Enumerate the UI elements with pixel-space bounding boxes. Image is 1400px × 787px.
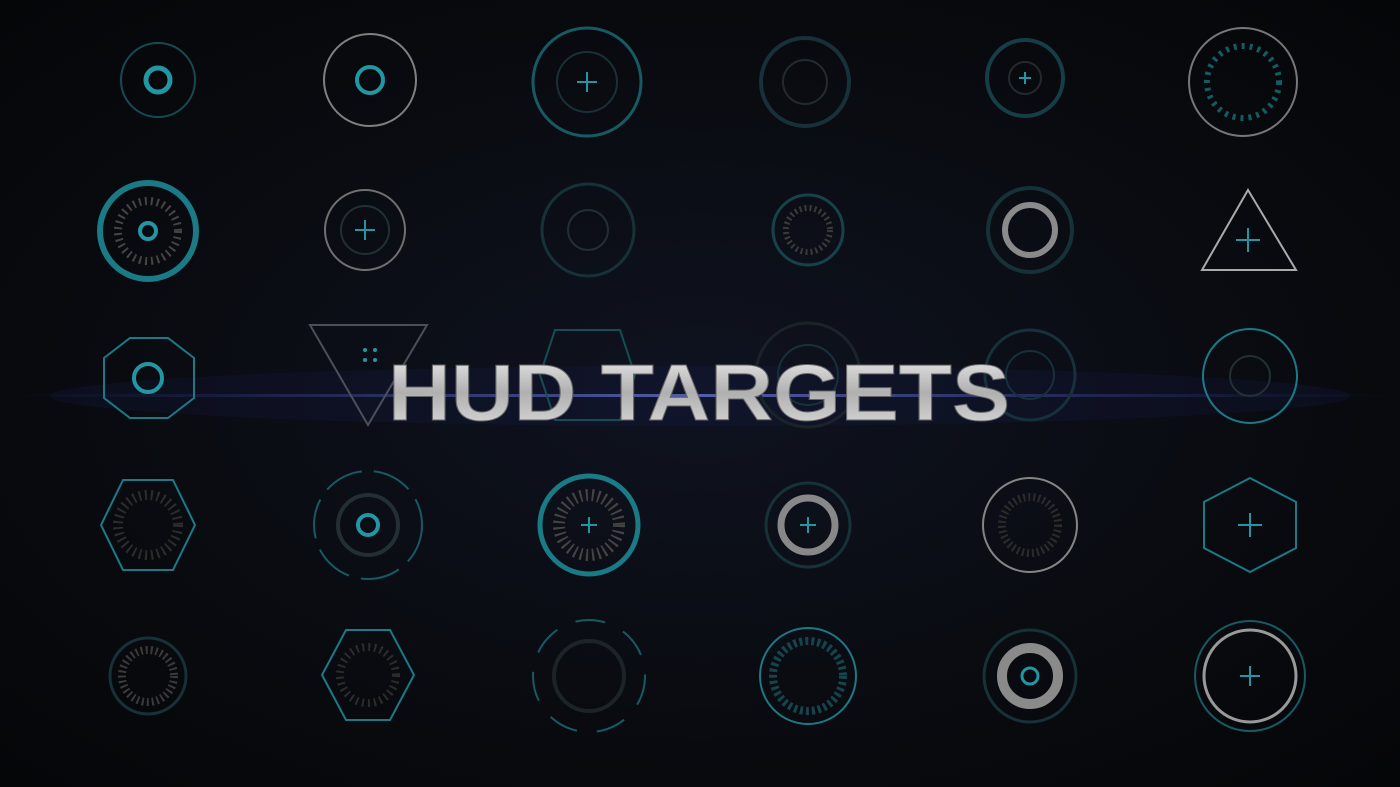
target r3c2 triangle [310,325,427,425]
target r5c5 [984,630,1076,722]
target r3c1 [104,338,194,418]
target r4c2 [314,471,422,579]
row 3 targets [104,323,1297,427]
target r5c4 [760,628,856,724]
target r3c4 [756,323,860,427]
row 2 targets [100,183,1296,279]
target r4c3 [540,476,638,574]
title: HUD TARGETS [388,348,1010,437]
target r4c6 [1204,478,1296,572]
row 1 targets [121,28,1297,136]
target r3c5 [985,330,1075,420]
target r3c3 [540,330,635,420]
target r5c1 [110,638,186,714]
target r4c1 [101,480,195,570]
target r1c4 [761,38,849,126]
target r2c3 [542,184,634,276]
target r2c2 [325,190,405,270]
target r4c4 [766,483,850,567]
target r2c5 [988,188,1072,272]
target r2c6 [1202,190,1296,270]
target r1c5 [987,40,1063,116]
target r5c6 [1195,621,1305,731]
target r1c2 [324,34,416,126]
target r2c4 [773,195,843,265]
target r3c6 [1203,329,1297,423]
target r4c5 [983,478,1077,572]
row 4 targets [101,471,1296,579]
target r5c2 [322,630,414,720]
target r1c3 [533,28,641,136]
target r5c3 [533,620,645,732]
target r1c6 [1189,28,1297,136]
target r2c1 [100,183,196,279]
target r1c1 [121,43,195,117]
row 5 targets [110,620,1305,732]
lens flare [0,366,1400,426]
